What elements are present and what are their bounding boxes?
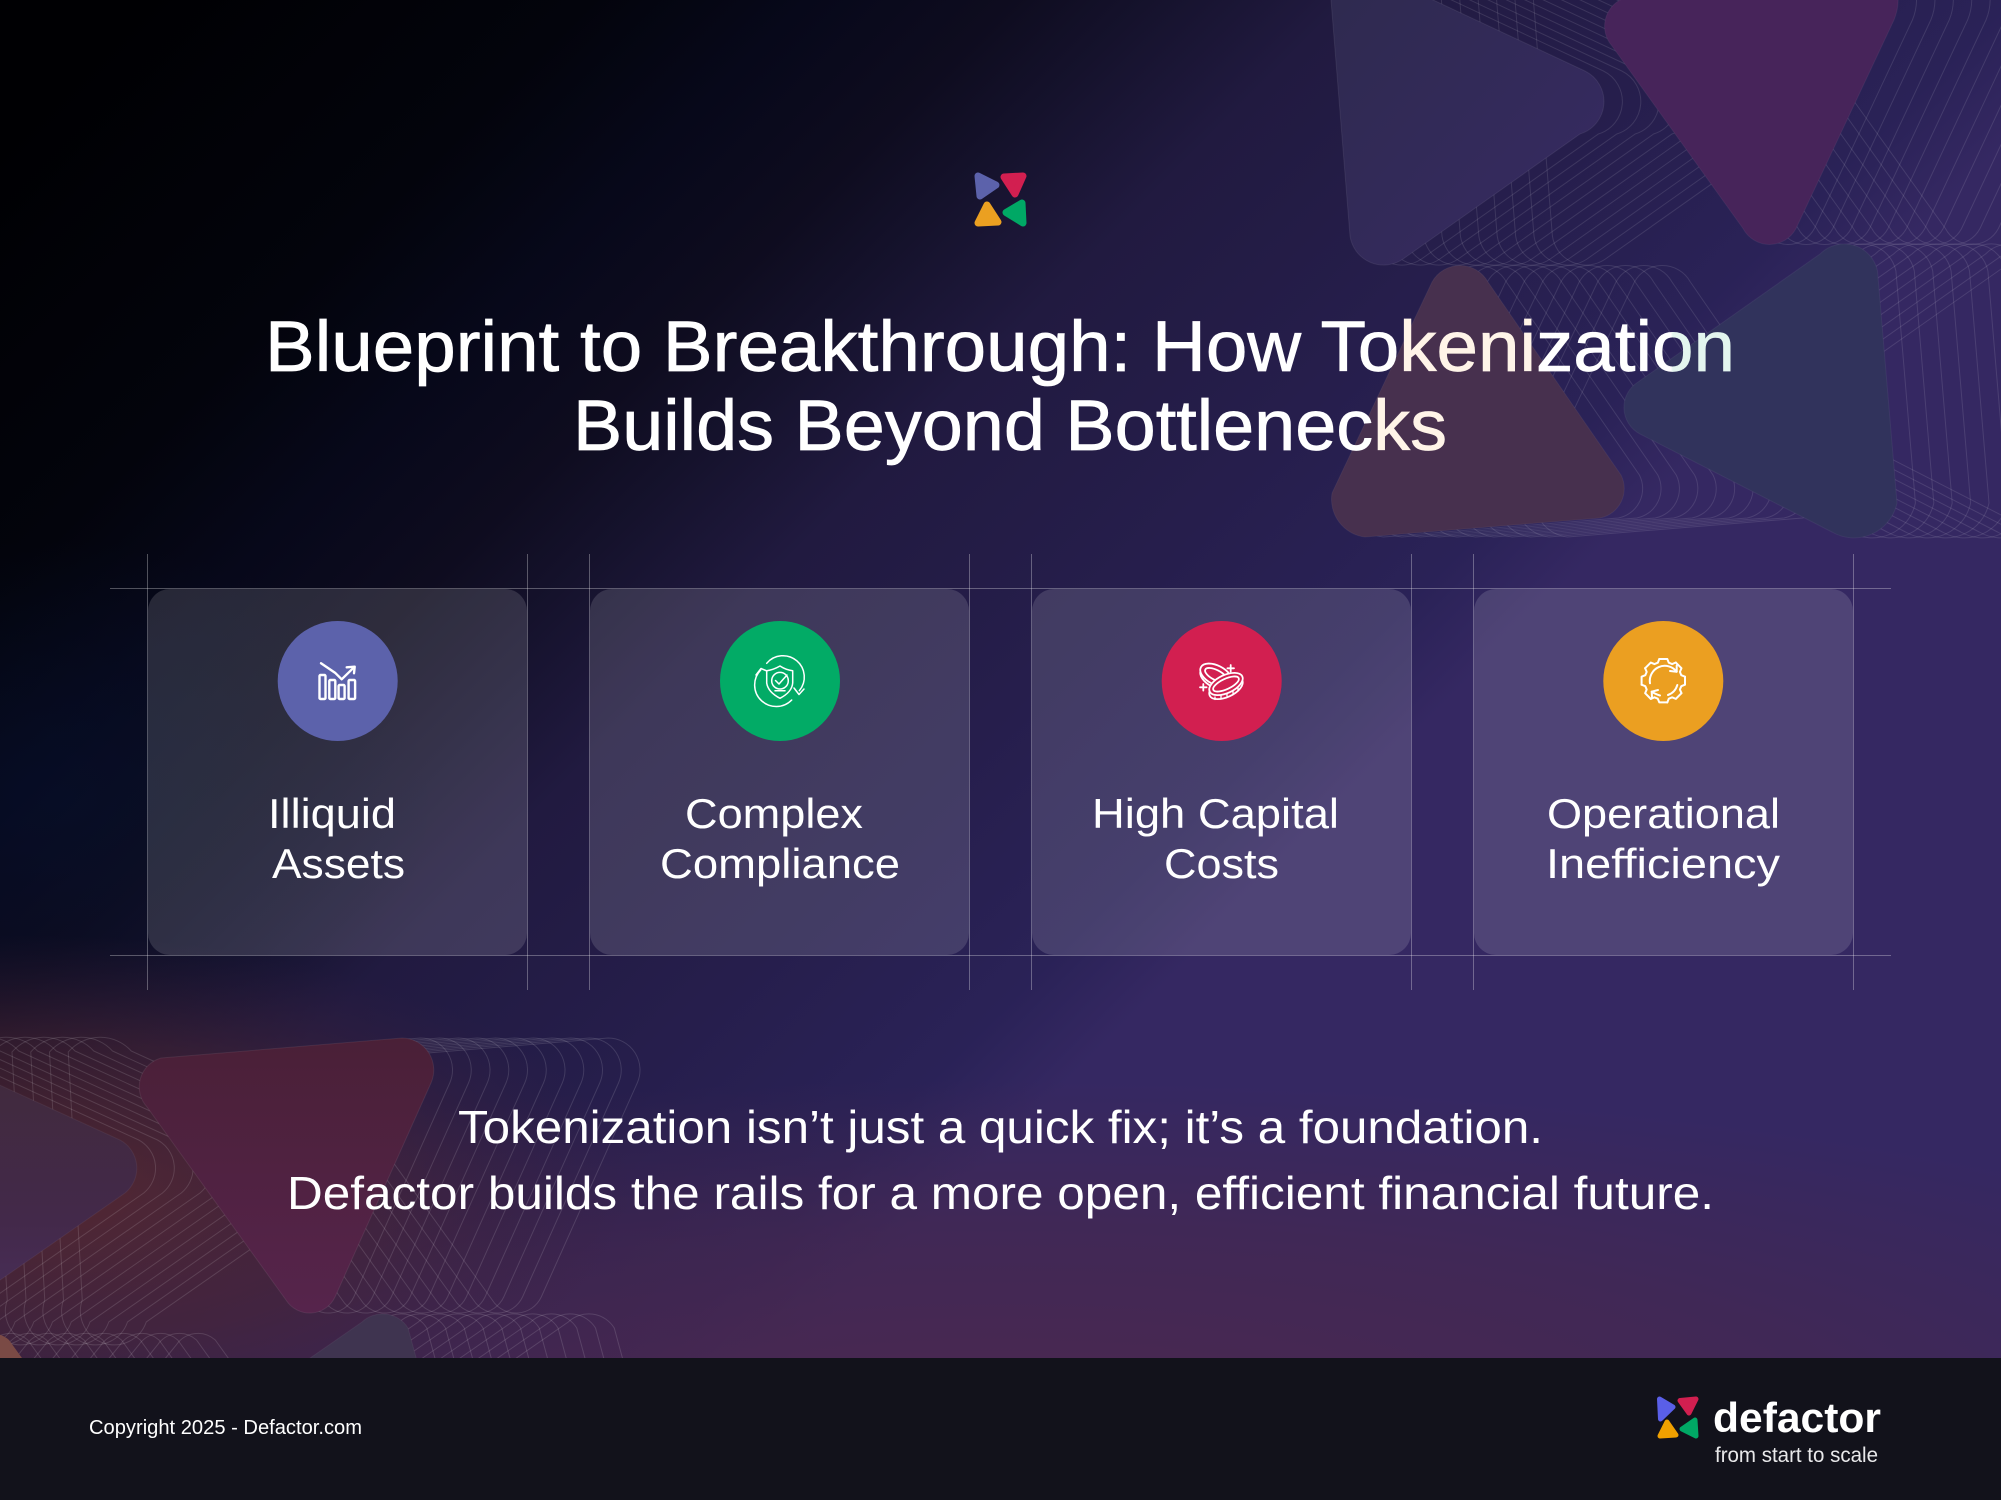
card label: Operational: [1547, 790, 1780, 837]
icon: gear with cycle arrows: [1603, 621, 1723, 741]
icon: falling and rising chart: [278, 621, 398, 741]
card label: High Capital: [1092, 790, 1339, 837]
logo mark: [1660, 1399, 1696, 1436]
top logo mark: [978, 176, 1023, 223]
card label: [1546, 790, 1780, 887]
footer bar: [0, 1358, 2001, 1500]
title: [265, 308, 1735, 466]
copyright text: Copyright 2025 - Defactor.com: [89, 1417, 362, 1439]
panel: high capital costs: [1032, 589, 1411, 955]
panel: illiquid assets: [148, 589, 527, 955]
card label: Assets: [272, 840, 405, 887]
card label: [660, 790, 900, 887]
card label: [1092, 790, 1339, 887]
tagline: from start to scale: [1715, 1444, 1878, 1467]
card label: Complex: [685, 790, 863, 837]
footer logo: [1660, 1394, 1881, 1467]
card panels row: [148, 589, 1853, 955]
card label: Compliance: [660, 840, 900, 887]
panel: complex compliance: [590, 589, 969, 955]
title: Blueprint to Breakthrough: How Tokenization: [265, 308, 1735, 387]
decorative triangles bottom left: [0, 1037, 640, 1372]
card label: Inefficiency: [1546, 840, 1780, 887]
card label: [268, 790, 405, 887]
closing statement: [287, 1101, 1714, 1219]
closing statement: Defactor builds the rails for a more open, efficient financial future.: [287, 1167, 1714, 1219]
decorative triangles top right: [1331, 0, 2001, 538]
title: Builds Beyond Bottlenecks: [573, 387, 1447, 466]
panel: operational inefficiency: [1474, 589, 1853, 955]
icon: shield with check: [720, 621, 840, 741]
icon: coins: [1162, 621, 1282, 741]
closing statement: Tokenization isn’t just a quick fix; it’s a foundation.: [458, 1101, 1543, 1153]
card label: Costs: [1164, 840, 1279, 887]
card label: Illiquid: [268, 790, 396, 837]
wordmark: defactor: [1713, 1394, 1881, 1441]
